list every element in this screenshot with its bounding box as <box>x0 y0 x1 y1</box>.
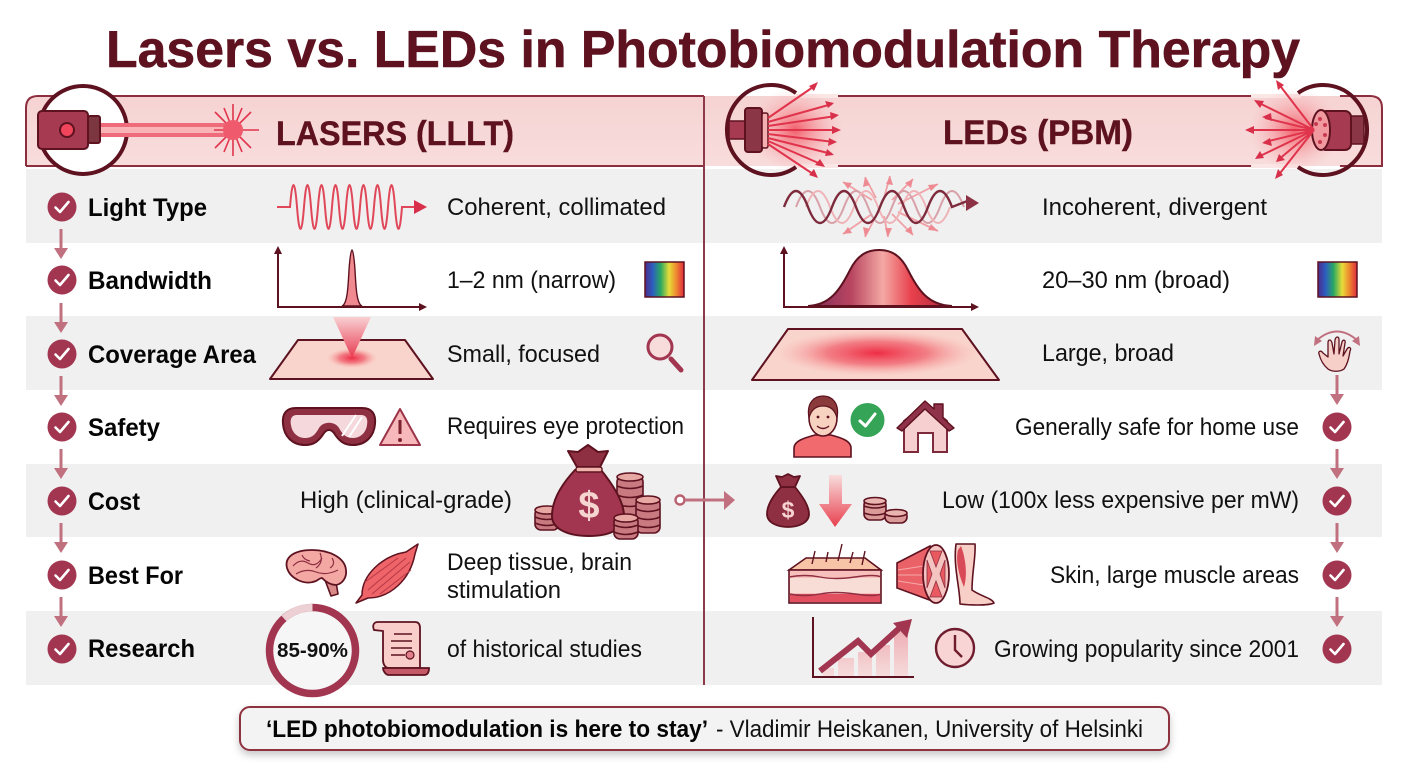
laser values: Requires eye protection <box>447 413 684 440</box>
LED values <box>942 194 1299 663</box>
row labels: Cost <box>88 488 141 516</box>
callout: quote: - Vladimir Heiskanen, University of Helsinki <box>716 716 1143 743</box>
icon: money bag and coins <box>535 445 660 539</box>
icon: house <box>897 401 954 452</box>
laser values: of historical studies <box>447 636 642 663</box>
chart: 85-90% donut <box>270 608 356 694</box>
LED values: Low (100x less expensive per mW) <box>942 487 1299 514</box>
laser values: 1–2 nm (narrow) <box>447 267 616 294</box>
icon: scroll <box>373 622 429 675</box>
icon: LED left <box>727 82 843 178</box>
row labels: Safety <box>88 414 160 442</box>
icon: laser device <box>38 86 225 174</box>
icon: green check <box>850 403 884 437</box>
laser values: Small, focused <box>447 341 600 368</box>
table row bands <box>26 169 1382 685</box>
LED values: Large, broad <box>1042 340 1174 367</box>
row labels: Light Type <box>88 194 207 222</box>
chart: broad bandwidth <box>780 246 979 311</box>
icon: muscle cross-section <box>897 545 949 603</box>
chart: growth <box>813 617 914 677</box>
icon: hand <box>1314 332 1360 371</box>
row labels <box>88 194 257 663</box>
icon: LED right <box>1245 80 1367 179</box>
icon: coherent wave <box>277 185 427 229</box>
laser values: Deep tissue, brain <box>447 549 632 576</box>
icon: incoherent waves <box>784 176 979 237</box>
divider <box>703 96 705 685</box>
icon: spectrum left <box>645 262 684 297</box>
icon: warning triangle <box>380 409 420 445</box>
icon: money bag and coins: $ <box>578 485 600 527</box>
LED values: Incoherent, divergent <box>1042 194 1267 221</box>
icon: magnifier <box>648 335 681 370</box>
laser values: Coherent, collimated <box>447 194 666 221</box>
icon: small coverage area <box>270 317 433 379</box>
row labels: Research <box>88 635 195 663</box>
left check column <box>48 192 76 664</box>
right check column <box>1322 375 1352 664</box>
LED values: Growing popularity since 2001 <box>994 636 1299 663</box>
laser values <box>300 194 684 663</box>
icon: skin layers <box>789 544 881 603</box>
arrow: cost connector <box>676 491 735 510</box>
icon: goggles <box>283 408 375 445</box>
icon: small money bag: $ <box>782 497 795 523</box>
arrow: cost down <box>819 475 852 527</box>
panel: lasers header <box>26 86 704 174</box>
row labels: Best For <box>88 562 183 590</box>
icon: spectrum right <box>1318 262 1357 297</box>
icon: muscle <box>356 544 418 603</box>
callout: quote: ‘LED photobiomodulation is here to stay’ <box>266 716 708 743</box>
row labels: Coverage Area <box>88 341 257 369</box>
LED values: 20–30 nm (broad) <box>1042 267 1230 294</box>
callout: quote <box>240 707 1169 750</box>
laser values: stimulation <box>447 577 561 604</box>
icon: laser starburst <box>214 104 259 156</box>
chart: narrow bandwidth <box>274 246 427 311</box>
chart: 85-90% donut: 85-90% <box>277 640 348 662</box>
heading: lasers: LASERS (LLLT) <box>276 115 514 153</box>
LED values: Generally safe for home use <box>1015 414 1299 441</box>
icon: small coins <box>864 498 907 523</box>
row labels: Bandwidth <box>88 267 212 295</box>
title: Lasers vs. LEDs in Photobiomodulation Therapy <box>106 21 1300 79</box>
icon: person <box>794 396 851 457</box>
panel: LEDs header <box>704 80 1382 179</box>
LED values: Skin, large muscle areas <box>1050 562 1299 589</box>
icon: large coverage area <box>752 329 999 380</box>
icon: leg <box>955 544 994 605</box>
icon: clock <box>936 629 974 667</box>
icon: brain <box>287 550 346 596</box>
heading: LEDs: LEDs (PBM) <box>943 114 1133 152</box>
icon: small money bag <box>767 474 809 527</box>
laser values: High (clinical-grade) <box>300 487 512 514</box>
